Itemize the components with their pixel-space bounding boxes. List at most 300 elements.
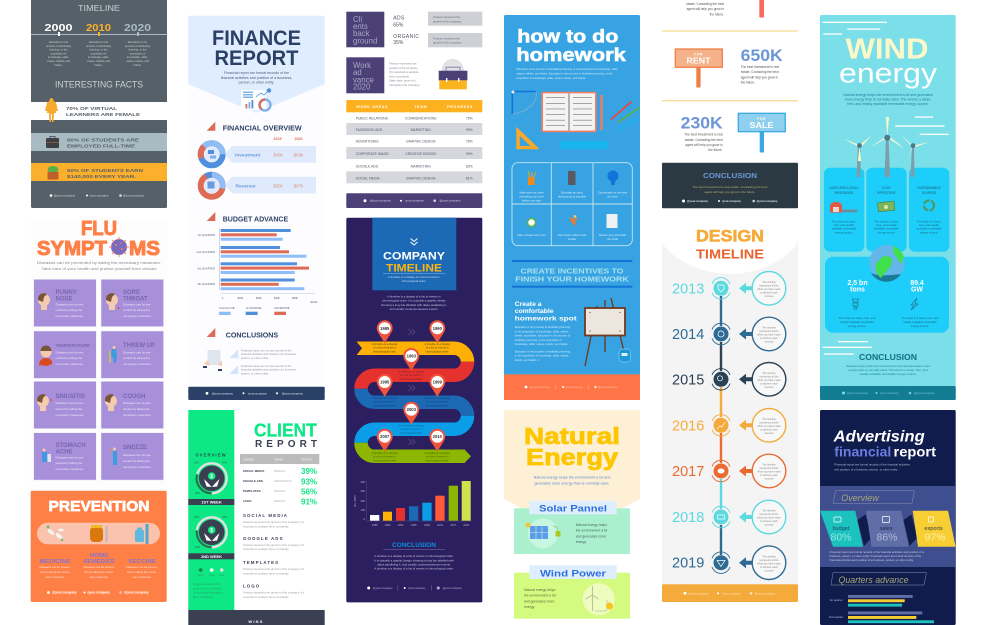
icon: open book	[541, 92, 597, 132]
tile: work advance 2020: Work	[353, 61, 371, 70]
symptom card: stomach ache: necessary measures.	[56, 467, 84, 471]
benefit card: limitless: free, and readily	[834, 223, 855, 227]
sign: for rent: FOR	[694, 52, 703, 56]
sign: for rent	[675, 49, 722, 88]
green sidebar	[188, 410, 234, 610]
sign: for sale: FOR	[757, 117, 766, 121]
tip captions: Review your work after	[599, 233, 626, 237]
remedy: medicine: ted by taking the neces-	[40, 570, 70, 574]
section: templates: Finance represent the growth of the company. It's	[243, 567, 305, 571]
footer: social handles: @your.company	[373, 586, 393, 590]
table: status: DESIGN	[274, 469, 286, 473]
road captions: of a list of events in	[426, 454, 449, 458]
symptom card: cough: vented by taking the	[123, 407, 150, 411]
bar chart: millions per year: 2007	[450, 523, 457, 527]
row: 2019: 2019	[672, 556, 704, 572]
note boxes: growth of the company.	[433, 40, 462, 44]
title: flu symptoms: FLU	[81, 218, 117, 240]
tip captions: Take a break every hour	[517, 233, 546, 237]
sidebar dots legend: Visits	[209, 574, 215, 577]
heading: quarters advance: Quarters advance	[838, 575, 908, 585]
road captions: of a list of events in	[400, 427, 423, 431]
title: how to do homework: how to do	[517, 25, 618, 46]
card: wind power: Natural energy helps	[524, 588, 556, 592]
footer: social handles	[367, 585, 463, 590]
footer: social handles: @your.company	[598, 385, 619, 389]
text: top listing fragment	[686, 2, 724, 16]
homework spot text: Education is the process of facilitating learning,	[515, 349, 571, 353]
title: advertising financial report: financial	[834, 445, 891, 460]
section: logo: LOGO	[243, 584, 260, 589]
timeline descriptions: knowledge, skills,	[127, 55, 148, 59]
row: investment	[201, 143, 316, 165]
title: company timeline: TIMELINE	[386, 262, 442, 274]
decorative wind lines top	[823, 22, 949, 135]
panel: prevention	[31, 491, 167, 602]
row: 2013: The timeline	[762, 281, 776, 284]
bar chart: quarters: 1st quarter	[829, 598, 843, 602]
benefit card: sustainable: The wind is a clean,	[917, 220, 942, 224]
heading: create a comfortable homework spot: homework spot	[515, 315, 578, 322]
footer: social handles	[662, 584, 798, 602]
chart legend: AUTHORISE	[246, 306, 262, 310]
stat: 650k: 650K	[741, 46, 783, 65]
heading: budget advance	[207, 212, 288, 223]
remedy: home remedies: ted by taking the neces-	[84, 570, 114, 574]
tip captions	[517, 190, 628, 241]
map pin: 1995	[377, 374, 393, 397]
row: investment: $65k	[294, 152, 304, 158]
footer: social handles	[47, 590, 149, 594]
table: work areas: 76%	[466, 140, 473, 144]
stat: 2.5 bn tons	[839, 280, 876, 328]
homework spot text: or the acquisition of knowledge, skills, values,	[515, 354, 569, 358]
table: work areas: COMMUNICATIONS	[405, 116, 437, 120]
footer: social handles: @your.company	[688, 591, 709, 595]
card: budget	[820, 511, 872, 547]
sidebar note: growth of the company.	[193, 586, 222, 590]
bar chart: quarterly budget: $40k	[256, 296, 262, 300]
conclusion block: @your.company	[687, 199, 708, 203]
icon: globe	[869, 245, 905, 282]
panel: finance report	[188, 16, 325, 401]
map pin: 1990: 1990	[433, 326, 443, 331]
gauge: first week	[194, 460, 228, 495]
section: logo: Finance represent the growth of the company. It's	[243, 590, 305, 594]
panel: flu symptoms	[31, 218, 167, 490]
tile: clients background	[346, 12, 384, 47]
table: work areas: PROGRESS	[447, 105, 473, 109]
symptom card: runny nose: vented by taking the	[56, 308, 83, 312]
row: 2015	[672, 362, 786, 396]
header pentagon	[188, 16, 325, 113]
header block	[372, 218, 456, 290]
bar chart: millions per year: 100	[361, 508, 366, 512]
text: top listing fragment: the future.	[710, 12, 724, 16]
column years: 2019	[274, 137, 282, 141]
stat: 2.5 bn tons: 2,5 bn	[847, 280, 868, 287]
note boxes: growth of the company.	[433, 19, 462, 23]
conclusion text: A timeline is a display of a list of events in chronological order.	[374, 554, 454, 558]
card: sales	[866, 511, 918, 547]
remedy: vaccine	[127, 559, 158, 579]
turbine: left	[844, 136, 872, 177]
benefit card: cost effective: available renewable	[874, 227, 899, 231]
header arc	[662, 218, 798, 274]
section: social media: SOCIAL MEDIA	[243, 513, 288, 518]
benefit card: sustainable: energy source.	[920, 230, 938, 234]
benefit card: limitless	[824, 168, 864, 252]
header description: chronological order.	[402, 279, 426, 283]
table: status: 39%	[301, 467, 317, 476]
grid: homework tips	[512, 163, 632, 246]
title: flu symptoms	[37, 218, 160, 260]
heading: conclusions	[207, 328, 278, 339]
table: status: STATUS	[301, 458, 312, 462]
row: revenue	[201, 175, 316, 197]
bar chart: millions per year: 400	[361, 480, 366, 484]
intro text	[843, 93, 933, 106]
title: company timeline: COMPANY	[383, 251, 446, 263]
homework spot text	[515, 325, 571, 362]
bar chart: millions per year: 1985	[372, 523, 378, 527]
timeline descriptions: knowledge, skills,	[88, 55, 109, 59]
fact: employed band: EMPLOYED FULL-TIME	[67, 144, 136, 150]
intro text: generates more energy than is normally used.	[534, 481, 610, 485]
homework spot text: facilitating learning, or the acquisition of	[515, 338, 562, 342]
symptom card: runny nose: RUNNY	[56, 290, 77, 296]
title: advertising financial report: report	[894, 445, 937, 460]
tile: clients background: ground	[353, 36, 377, 46]
gauge: second week: $	[210, 528, 213, 534]
map pin: 2003: 2003	[407, 407, 417, 412]
text: top listing fragment: agent will help you grow in	[687, 7, 724, 11]
table: status: LOGO	[243, 499, 252, 503]
map pin: 1995: 1995	[380, 380, 390, 384]
table: status: ISSUES	[243, 458, 254, 462]
bar chart: millions per year: 2010	[463, 523, 470, 527]
title: finance report	[212, 27, 301, 70]
footer: social handles: /your.company	[405, 199, 424, 203]
title: wind energy	[839, 33, 937, 89]
intro text	[534, 476, 610, 485]
benefit card: limitless: LIMITLESS LOCAL	[829, 186, 859, 190]
section: logo	[243, 584, 305, 599]
footer: social handles	[820, 386, 956, 400]
symptom card: sore throat: necessary measures.	[123, 314, 152, 318]
tip captions: breaks	[568, 237, 577, 241]
timeline descriptions: learning, or the	[90, 48, 108, 52]
table: work areas: 83%	[466, 164, 473, 168]
overview text	[830, 550, 924, 562]
row: 2019: represents all the	[759, 559, 779, 562]
bar chart: quarterly budget: 1st QUARTER	[198, 233, 215, 237]
symptom card: stomach ache	[34, 433, 96, 480]
chart legend: ADVERTISE	[274, 306, 290, 310]
intro text: chronological order. It is typically a graphic design	[382, 299, 446, 303]
conclusion block: CONCLUSION	[703, 171, 757, 180]
stat: 650k: estate. Contacting the best	[741, 70, 779, 74]
table: work areas: 93%	[466, 128, 473, 132]
bar chart: quarters: 2nd quarter	[829, 615, 843, 619]
row: 2013: success	[764, 295, 774, 298]
icon: pencil	[600, 95, 603, 130]
row: 2018: effort you have made	[757, 517, 781, 520]
table: status: TEAM	[274, 458, 283, 462]
symptom card: sore throat: THROAT	[123, 296, 148, 302]
bar chart: millions per year: 300	[361, 489, 366, 493]
heading: overview	[833, 491, 914, 503]
conclusion text: A timeline is a display of a list of events in chronological order.	[374, 566, 454, 570]
stat: 89.4 gw: 89.4	[910, 280, 924, 287]
symptom card: sinusitis: vented by taking the	[56, 407, 83, 411]
card: exports: 97%	[924, 532, 946, 544]
header description	[383, 274, 445, 283]
fact: virtual learners band	[31, 98, 167, 122]
overview text: business, person, or other entity. Financial report are formal records of the	[830, 554, 922, 558]
intro text: and usually contemporaneous events.	[390, 307, 439, 311]
icon: easel	[585, 298, 626, 366]
road captions: chronological order.	[373, 458, 397, 462]
symptom card: threw up: vented by taking the	[123, 356, 150, 360]
years row: 2010	[86, 22, 111, 34]
benefit card: cost effective: free, and readily	[876, 223, 897, 227]
icon: checklist	[606, 214, 618, 228]
homework spot text: or the acquisition of knowledge, skills, values,	[515, 329, 569, 333]
title: client report: CLIENT	[254, 421, 317, 441]
conclusion block	[662, 163, 798, 208]
remedy: medicine: sary measures.	[45, 575, 65, 579]
section: logo: important to analyze them constantly.	[243, 595, 289, 599]
stat: 230k: the future.	[708, 148, 723, 152]
row: 2015: success	[764, 386, 774, 389]
sign: for rent: RENT	[686, 56, 711, 65]
intro text: values, beliefs, and habits. Education is the process of facilitating learning, or the	[516, 72, 613, 76]
bar chart: millions per year: 1995	[411, 523, 417, 527]
intro text: more energy than is normally used. The wind is a clean,	[845, 98, 931, 102]
intro text: acquisition of knowledge, skills, values, beliefs, and habits.	[516, 76, 586, 80]
title: client report	[254, 421, 317, 450]
conclusion notes: financial activities and position of a business,	[241, 368, 297, 372]
footer: social handles: @your.company	[755, 591, 776, 595]
benefit card: limitless: The wind is a clean,	[832, 220, 857, 224]
gauge: second week: 40%	[222, 515, 228, 519]
title: flu symptoms: SYMPT	[37, 238, 107, 260]
tip captions: Make sure you have	[519, 190, 544, 194]
stat: 2.5 bn tons: tons	[850, 286, 865, 294]
remedy: home remedies: Diseases can be preven-	[84, 565, 115, 569]
row: 2014: success	[764, 341, 774, 344]
icon: finance charts	[241, 88, 271, 110]
title: finance report: REPORT	[214, 47, 299, 70]
row: 2014: to achieve each	[760, 337, 778, 340]
map pin: 1985: 1985	[380, 326, 390, 331]
note boxes: Finance represent the	[433, 36, 461, 40]
note boxes: Finance represent the	[433, 15, 461, 19]
heading: quarters advance	[831, 573, 926, 585]
pill band with remedy icons	[37, 523, 160, 544]
remedy: medicine: Diseases can be preven-	[40, 565, 71, 569]
stat: 2.5 bn tons: energy source.	[848, 324, 866, 328]
table: status: 56%	[301, 487, 317, 496]
row: 2014: represents all the	[759, 330, 779, 333]
row: 2019: to achieve each	[760, 566, 778, 569]
table: status: 91%	[301, 497, 317, 506]
row: 2019	[672, 546, 786, 580]
row: 2014: 2014	[672, 327, 704, 343]
road captions: chronological order.	[373, 350, 397, 354]
symptom card: sore throat: Diseases can be pre-	[123, 302, 151, 306]
bar chart: millions per year: 1990	[385, 523, 391, 527]
symptom card: threw up: necessary measures.	[123, 362, 152, 366]
timeline descriptions: process of facilitating	[86, 44, 112, 48]
row: revenue: Revenue	[236, 184, 256, 190]
row: 2018: represents all the	[759, 513, 779, 516]
row: 2019: effort you have made	[757, 562, 781, 565]
footer: social handles: /your.company	[722, 591, 741, 595]
icon: chevrons	[410, 238, 418, 245]
subtitle: Take care of your health and protect yourself from viruses	[42, 266, 156, 271]
years row: 2000	[44, 22, 73, 34]
symptom card: sneeze: Diseases can be pre-	[123, 453, 151, 457]
map pin: 2007: 2007	[380, 434, 390, 439]
footer: social handles: /your.company	[408, 586, 426, 590]
bar chart: quarterly budget: 4th QUARTER	[197, 282, 215, 286]
bar chart: millions per year: 1993	[398, 523, 404, 527]
footer: social handles	[50, 194, 144, 198]
tile: clients background: back	[353, 29, 370, 38]
symptom card: runny nose: necessary measures.	[56, 314, 84, 318]
bar chart: quarterly budget: $60k	[274, 296, 281, 300]
symptom card: temperature: necessary measures.	[56, 362, 84, 366]
heading: financial overview	[207, 122, 302, 133]
heading: conclusion: CONCLUSION	[392, 542, 436, 549]
road captions: A timeline is a display	[372, 396, 398, 400]
title: how to do homework: homework	[516, 44, 627, 65]
benefit card: cost effective: The wind is a clean,	[874, 220, 899, 224]
row: 2015: The timeline	[762, 372, 776, 375]
tile: clients background: ents	[353, 22, 368, 31]
card: solar pannel: energy.	[576, 540, 587, 544]
card: solar pannel: the environment a lot	[576, 529, 607, 533]
icon: hands holding document	[203, 350, 222, 371]
intro text: person, or other entity.	[239, 80, 274, 84]
table: status: MARKETING	[274, 479, 293, 483]
conclusion notes: Financial report are formal records of the	[241, 348, 292, 352]
symptom card: stomach ache: Diseases can be pre-	[56, 456, 84, 460]
row: 2017: success	[764, 478, 774, 481]
footer band: wins: WINS	[248, 619, 264, 624]
label: 2nd week	[188, 553, 234, 559]
symptom card: sinusitis	[34, 381, 96, 429]
symptom card: sneeze: necessary measures.	[123, 465, 152, 469]
intro text: and position of a business, person, or other entity.	[834, 468, 898, 472]
bar chart: millions per year: MILLIONS	[354, 495, 357, 507]
table: status: 93%	[301, 477, 317, 486]
sign: for sale: SALE	[750, 121, 774, 130]
card: exports	[913, 511, 956, 547]
timeline descriptions: knowledge, skills,	[48, 55, 69, 59]
card: sales: 86%	[876, 532, 898, 544]
row: 2014: effort you have made	[757, 334, 781, 337]
benefit card: cost effective: EFFECTIVE	[877, 191, 896, 195]
decorative wind lines bottom	[823, 341, 872, 355]
section: google ads: Finance represent the growth of the company. It's	[243, 543, 305, 547]
map pin: 1985	[377, 320, 393, 343]
section: templates: TEMPLATES	[243, 560, 279, 565]
row: 2017: represents all the	[759, 467, 779, 470]
title: natural energy: Natural	[524, 423, 620, 449]
heading: create a comfortable homework spot	[515, 301, 578, 322]
tip captions: you finish	[607, 237, 619, 241]
benefit card: sustainable: SOURCE	[922, 191, 937, 195]
timeline descriptions: process of facilitating	[125, 44, 151, 48]
card: solar pannel: Natural energy helps	[576, 523, 607, 527]
benefit card: cost effective: energy source.	[877, 230, 896, 234]
fact: earnings band: 50% OF STUDENTS EARN	[67, 168, 144, 174]
row: 2016: success	[764, 432, 774, 435]
panel: design timeline	[662, 218, 798, 602]
conclusion text: energy than is normally used. The wind is a clean, free, and	[848, 368, 928, 372]
years row	[44, 22, 151, 34]
header pentagon	[504, 410, 640, 512]
footer: social handles: @your.company	[442, 586, 463, 590]
row: 2018	[672, 500, 786, 534]
title: design timeline: DESIGN	[696, 227, 764, 246]
timeline descriptions: values, beliefs, and	[87, 59, 111, 63]
symptom card: threw up	[101, 331, 164, 378]
symptom card: stomach ache: ACHE	[56, 450, 73, 456]
title: how to do homework	[516, 25, 627, 65]
conclusion text: It is typically a graphic design showing a long bar labelled with	[374, 558, 454, 562]
row: 2014: The timeline	[762, 327, 776, 330]
fact: earnings band	[31, 163, 167, 181]
title: wind energy: WIND	[846, 33, 928, 65]
row: revenue: $87k	[294, 184, 304, 188]
timeline descriptions: Education is the	[89, 40, 109, 44]
row: 2015: 2015	[672, 372, 704, 388]
banner: create incentives	[512, 260, 632, 288]
panel: education timeline	[31, 0, 167, 208]
benefit card: sustainable: available renewable	[917, 227, 942, 231]
row: 2019: success	[764, 569, 774, 572]
title: wind energy: energy	[839, 58, 937, 89]
timeline descriptions: habits.	[134, 63, 142, 67]
benefit card: cost effective: COST	[882, 186, 891, 190]
road captions: of a list of events in	[426, 400, 449, 404]
timeline descriptions: process of facilitating	[46, 44, 72, 48]
symptom card: cough: COUGH	[123, 394, 145, 400]
row: 2013	[672, 272, 786, 305]
timeline descriptions: habits.	[55, 63, 63, 67]
remedy: vaccine: ted by taking the neces-	[127, 570, 157, 574]
divider	[662, 100, 798, 101]
benefit card: limitless: available renewable	[832, 227, 857, 231]
description: growth of the company.	[389, 66, 418, 70]
map pin: 1999: 1999	[433, 380, 443, 384]
icon: coloured pens	[612, 102, 639, 130]
gauge: second week	[194, 515, 228, 549]
section: templates: important to analyze them constantly.	[243, 571, 289, 575]
table: work areas: ADVERTISING	[356, 140, 379, 144]
footer: social handles: /your.company	[880, 391, 899, 395]
intro text: showing a long bar labelled with dates paralleling it,	[381, 303, 447, 307]
overview band	[820, 486, 956, 567]
map pin: 1993: 1993	[407, 354, 417, 358]
stat: 230k: estate. Contacting the best	[685, 138, 723, 142]
road captions: A timeline is a display	[424, 451, 451, 455]
table: status: DESIGN	[274, 489, 286, 493]
